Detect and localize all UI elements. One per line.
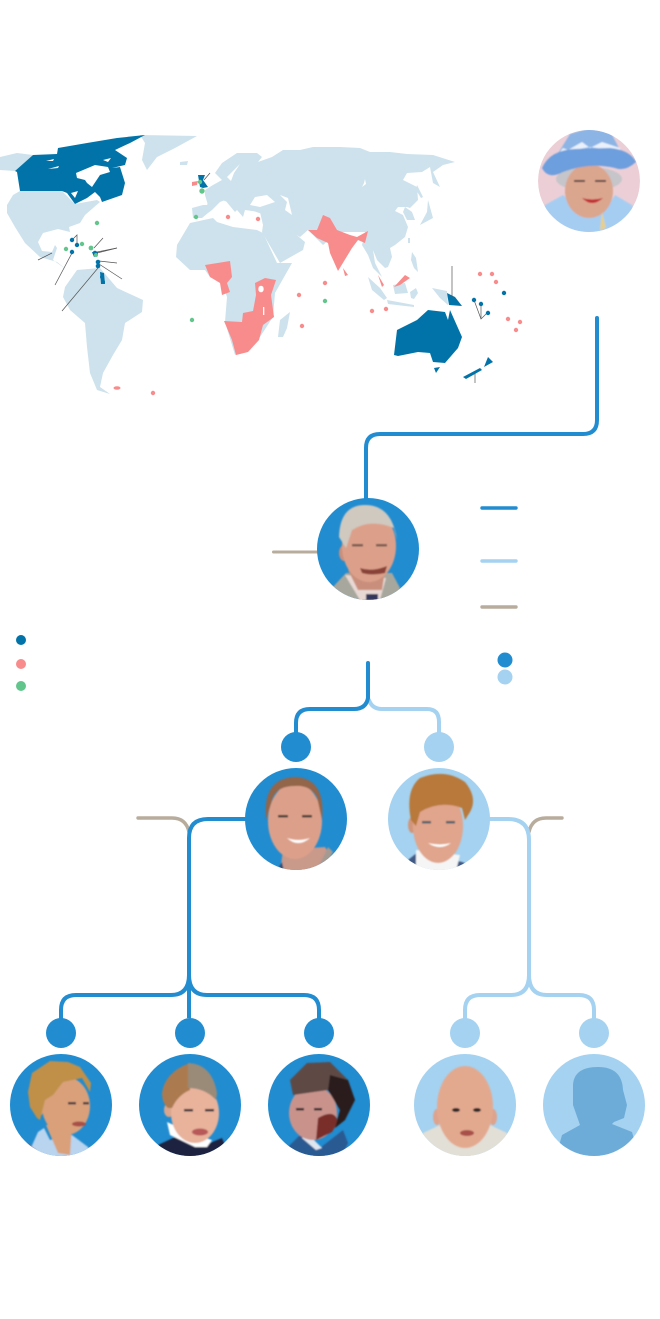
connector: Charles to Harry <box>369 700 439 740</box>
key line: tan <box>482 605 516 609</box>
key: line and dot legend <box>482 508 516 684</box>
portrait: Charlotte <box>139 1054 241 1158</box>
map: lakes <box>258 286 264 315</box>
dot: Louis <box>304 1018 334 1048</box>
legend dot: republic <box>16 659 26 669</box>
portrait: Harry <box>388 768 490 875</box>
key dot: light blue <box>498 670 512 684</box>
legend dot: realm <box>16 635 26 645</box>
map: realms in dark blue <box>15 135 493 379</box>
map: leader lines <box>38 173 488 383</box>
dot: Lilibet <box>579 1018 609 1048</box>
map legend dots <box>16 635 26 691</box>
map: island dots, red republics <box>151 215 522 395</box>
dot: Charlotte <box>175 1018 205 1048</box>
connector: Charles to William <box>296 663 368 740</box>
succession dot: William <box>281 732 311 762</box>
portrait: George <box>10 1054 112 1158</box>
tan spouse line: William <box>138 818 189 832</box>
dot: Archie <box>450 1018 480 1048</box>
map: Commonwealth republics in red <box>114 181 410 390</box>
infographic canvas <box>0 130 645 1156</box>
map: base land masses <box>0 135 455 394</box>
portrait: Louis <box>268 1054 370 1160</box>
key dot: blue <box>498 652 512 668</box>
portrait: Queen <box>538 130 640 232</box>
key line: blue <box>482 506 516 510</box>
tan spouse line: Harry <box>529 818 562 832</box>
connector: Harry to children <box>465 819 594 1020</box>
key line: light blue <box>482 559 516 563</box>
dot: George <box>46 1018 76 1048</box>
portrait: silhouette placeholder <box>543 1054 645 1160</box>
portrait: William <box>245 768 347 875</box>
map: Canadian bays cut out <box>46 158 111 198</box>
portrait: Archie <box>414 1054 516 1160</box>
succession dot: Harry <box>424 732 454 762</box>
map: island dots, blue realms <box>70 238 506 315</box>
map: island dots, green territories <box>64 180 327 322</box>
world map of Commonwealth realms <box>0 135 522 395</box>
legend dot: territory <box>16 681 26 691</box>
tan spouse line: Charles <box>274 550 320 554</box>
trunk line: Queen to Charles <box>366 318 597 500</box>
succession dots: grandchildren <box>46 1018 609 1048</box>
map: inland seas <box>227 164 366 215</box>
connector: William to children <box>61 819 319 1020</box>
portrait: Charles <box>317 498 419 602</box>
